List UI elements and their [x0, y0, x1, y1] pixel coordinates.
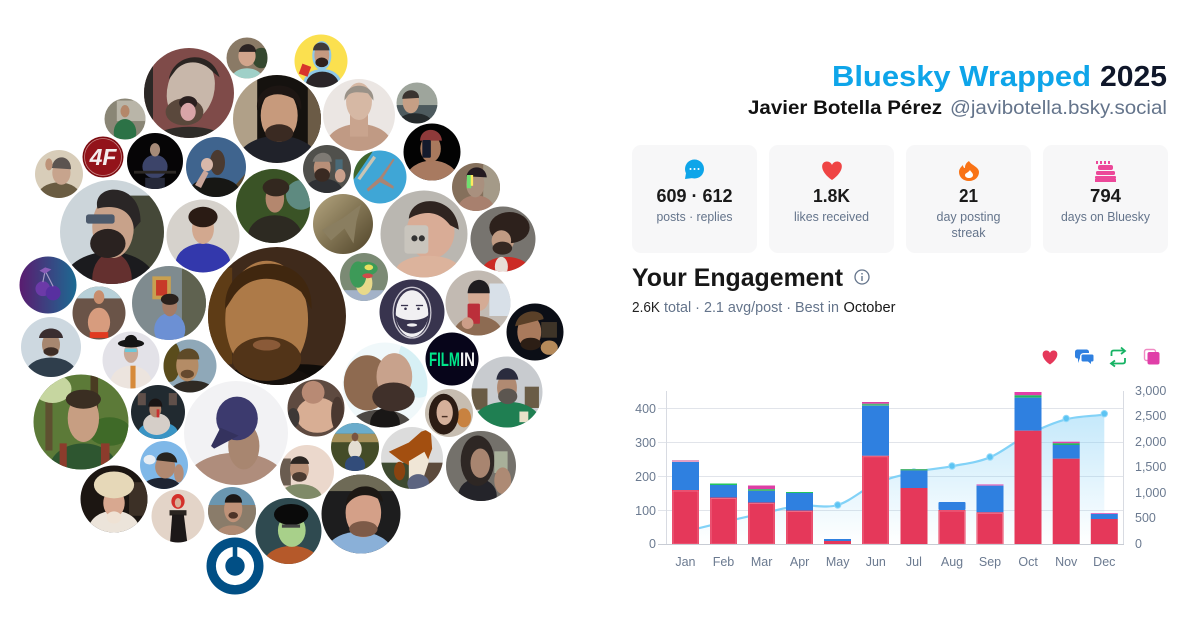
stat card: day posting streak: 21 [959, 186, 978, 206]
engagement summary [632, 300, 896, 316]
left axis labels [635, 402, 656, 551]
right axis labels: 1,000 [1135, 486, 1166, 500]
stat card: posts and replies: 609 · 612 [656, 186, 732, 206]
avatar: blue hat and sky [140, 441, 188, 498]
grid lines [658, 391, 1124, 544]
right axis labels: 2,500 [1135, 409, 1166, 423]
avatar: curly hair dark shirt [233, 75, 321, 163]
avatar: red swimwear on rocks [72, 286, 126, 340]
avatar: long hair and beard [342, 342, 428, 428]
month labels: Sep [979, 555, 1001, 569]
bar: Dec [1091, 513, 1118, 544]
month labels: Mar [751, 555, 772, 569]
month labels: Feb [713, 555, 734, 569]
avatar: 4F logo: 4F [89, 144, 117, 170]
chart baseline [658, 544, 1124, 546]
engagement summary: October [844, 300, 896, 316]
avatar: tongue out [144, 48, 234, 138]
stat card: posts and replies: posts · replies [656, 209, 733, 224]
stat card: likes received [769, 145, 894, 253]
avatar: blue ring logo [206, 538, 264, 594]
stat card: likes received: likes received [794, 209, 869, 224]
bar: May [824, 539, 851, 544]
icon: info [855, 270, 869, 284]
avatar: phone mirror selfie [380, 190, 468, 286]
avatar: cap and phone [303, 145, 351, 193]
avatar: olive tee [279, 445, 334, 511]
month labels: Jan [675, 555, 696, 569]
month labels: Apr [790, 555, 809, 569]
bar: Nov [1053, 442, 1080, 544]
month labels: Oct [1018, 555, 1038, 569]
avatar: forest selfie [34, 374, 128, 470]
right axis labels: 2,000 [1135, 435, 1166, 449]
bar: Mar [748, 486, 775, 544]
avatar cluster [20, 34, 564, 594]
avatar: swimmer in pool [354, 150, 406, 204]
header: Bluesky Wrapped 2025 title: 2025 [1100, 61, 1167, 93]
avatar: red phone selfie [446, 270, 510, 336]
avatar: Filmin logo [426, 332, 478, 386]
avatar: drag queen [80, 466, 149, 548]
left axis labels: 0 [649, 537, 656, 551]
right axis labels: 0 [1135, 537, 1142, 551]
avatar: blue tee [166, 200, 240, 272]
engagement summary: 2.6K [632, 300, 660, 316]
bar: Sep [976, 484, 1004, 544]
avatar: sand unicorn [313, 194, 373, 254]
avatar: coast selfie [396, 82, 438, 124]
avatar: stage seated [127, 133, 183, 189]
avatar: cherries [20, 256, 76, 314]
header: Bluesky Wrapped 2025 title: Bluesky Wrapped [832, 61, 1091, 93]
right axis labels: 500 [1135, 511, 1156, 525]
bar: Aug [938, 502, 966, 544]
avatar: large dim selfie [208, 247, 346, 385]
avatar: fox illustration [381, 427, 446, 493]
avatar: yellow background [294, 34, 348, 88]
stat card: day posting streak [906, 145, 1031, 253]
avatar: cap from behind [184, 381, 288, 485]
left axis labels: 400 [635, 402, 656, 416]
avatar: glasses hand in hair [35, 150, 83, 198]
heading: Your Engagement: Your Engagement [632, 264, 844, 292]
bar: Oct [1014, 392, 1042, 544]
right axis labels: 3,000 [1135, 384, 1166, 398]
avatar: colosseum selfie [226, 38, 268, 78]
left axis labels: 300 [635, 436, 656, 450]
header: user name and handle: @javibotella.bsky.social [950, 98, 1167, 119]
bar: Feb [710, 484, 737, 544]
left axis labels: 200 [635, 470, 656, 484]
month labels: Nov [1055, 555, 1078, 569]
chart legend [1043, 348, 1160, 366]
avatar: croc pixel art [340, 253, 388, 302]
combo chart: monthly engagement [635, 384, 1166, 569]
avatar: shirtless reclined [287, 380, 344, 436]
icon: legend heart [1043, 350, 1057, 364]
avatar: outdoor sunlit [164, 340, 216, 392]
avatar: vest in garden [236, 169, 310, 243]
avatar: bearded illustration [380, 280, 444, 344]
avatar: curly hair red jacket [470, 206, 536, 272]
avatar: red cap mirror selfie [404, 124, 460, 180]
avatar: garden photo [331, 423, 379, 474]
month labels: Jun [866, 555, 886, 569]
avatar: illustrated muscle man [323, 79, 395, 151]
avatar: red telephone [131, 385, 185, 441]
icon: chat bubble [685, 160, 704, 179]
avatar: blue shirt street poster [132, 266, 206, 340]
icon: legend quotes [1144, 350, 1160, 364]
stat card: days on Bluesky [1043, 145, 1168, 253]
stat card: days on Bluesky: days on Bluesky [1061, 209, 1150, 224]
avatar: green football jersey [472, 356, 542, 428]
month labels [675, 555, 1115, 569]
stat card: posts and replies [632, 145, 757, 253]
avatar: blue striped shirt [322, 474, 400, 575]
avatar: beach portrait [208, 487, 256, 545]
avatar: curly hair moustache [425, 389, 473, 437]
month labels: Aug [941, 555, 963, 569]
month labels: Dec [1093, 555, 1115, 569]
avatar: blue wall hand [186, 137, 246, 197]
bar: Jan [672, 460, 699, 544]
avatar: beard and glasses [60, 180, 164, 284]
month labels: Jul [906, 555, 922, 569]
icon: legend replies [1075, 350, 1094, 364]
bar: Apr [786, 492, 813, 544]
stacked bars [672, 392, 1118, 544]
avatar: green shirt conference [104, 98, 146, 140]
avatar: green cartoon character [256, 498, 322, 582]
header: user name and handle [748, 98, 1167, 119]
left axis labels: 100 [635, 504, 656, 518]
avatar: 4F logo [82, 136, 124, 178]
avatar: Filmin logo: FILM [429, 350, 460, 371]
avatar: Filmin logo: IN [460, 350, 475, 371]
icon: legend reposts [1111, 348, 1125, 366]
icon: flame [959, 161, 979, 181]
stat card: day posting streak: day posting [936, 209, 1000, 224]
avatar: cowboy hat [102, 332, 160, 388]
avatar: dark phone selfie [506, 304, 564, 360]
header: user name and handle: Javier Botella Pérez [748, 98, 942, 119]
month labels: May [826, 555, 850, 569]
icon: heart [822, 161, 842, 180]
bar: Jul [900, 469, 928, 544]
stat card: day posting streak: streak [952, 225, 986, 240]
engagement summary: total · 2.1 avg/post · Best in [664, 300, 839, 316]
avatar: red hair black dress [152, 490, 204, 542]
right axis labels [1135, 384, 1166, 551]
icon: birthday cake [1095, 161, 1116, 182]
right axis labels: 1,500 [1135, 460, 1166, 474]
avatar: cap and rain jacket [21, 317, 81, 377]
avatar: rainbow light [452, 163, 500, 211]
stat card: days on Bluesky: 794 [1090, 186, 1121, 206]
cumulative area and line [685, 410, 1108, 544]
bar: Jun [862, 402, 889, 544]
avatar: long hair black tank [446, 431, 516, 513]
stat card: likes received: 1.8K [813, 186, 850, 206]
